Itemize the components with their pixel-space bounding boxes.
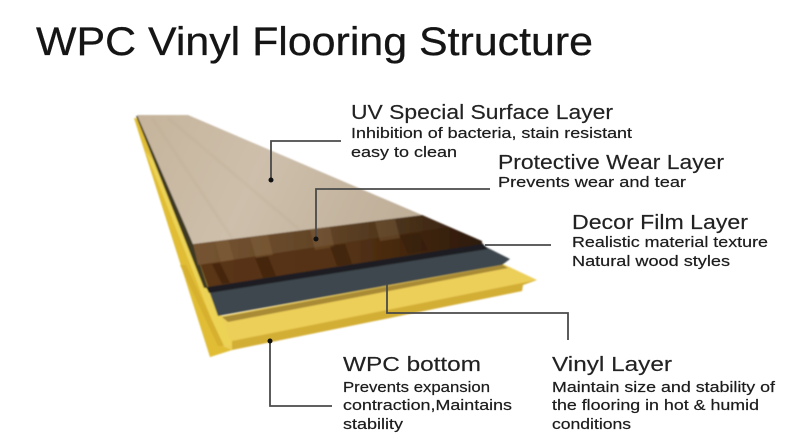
label: protective wear layer: Protective Wear Layer — [498, 152, 724, 174]
layer: UV surface — [137, 115, 422, 244]
label: decor film layer: Natural wood styles — [572, 254, 730, 270]
label: WPC bottom: contraction,Maintains — [343, 398, 512, 414]
label: protective wear layer — [498, 152, 724, 191]
label: vinyl layer: the flooring in hot & humid — [552, 398, 759, 414]
label: WPC bottom: WPC bottom — [343, 354, 481, 376]
label: vinyl layer: conditions — [552, 417, 631, 433]
label: decor film layer: Decor Film Layer — [572, 212, 748, 234]
label: WPC bottom: stability — [343, 417, 404, 433]
label: WPC bottom: Prevents expansion — [343, 380, 490, 396]
leader lines — [270, 141, 568, 406]
layer: decor film — [136, 116, 482, 288]
label: decor film layer: Realistic material texture — [572, 235, 768, 251]
label: UV special surface layer: UV Special Surface Layer — [351, 102, 613, 124]
label: protective wear layer: Prevents wear and tear — [498, 175, 686, 191]
label: vinyl layer — [552, 354, 776, 433]
label: vinyl layer: Vinyl Layer — [552, 354, 672, 376]
label: UV special surface layer: Inhibition of bacteria, stain resistant — [351, 126, 632, 142]
layer: vinyl core — [206, 243, 510, 316]
label: vinyl layer: Maintain size and stability of — [552, 380, 776, 396]
layer: WPC bottom — [134, 118, 537, 357]
title: WPC Vinyl Flooring Structure — [36, 20, 593, 64]
label: decor film layer — [572, 212, 768, 270]
flooring plank illustration — [134, 115, 537, 357]
leader dots — [268, 178, 318, 344]
label: WPC bottom — [343, 354, 512, 433]
label: UV special surface layer: easy to clean — [351, 145, 457, 161]
label: UV special surface layer — [351, 102, 632, 161]
